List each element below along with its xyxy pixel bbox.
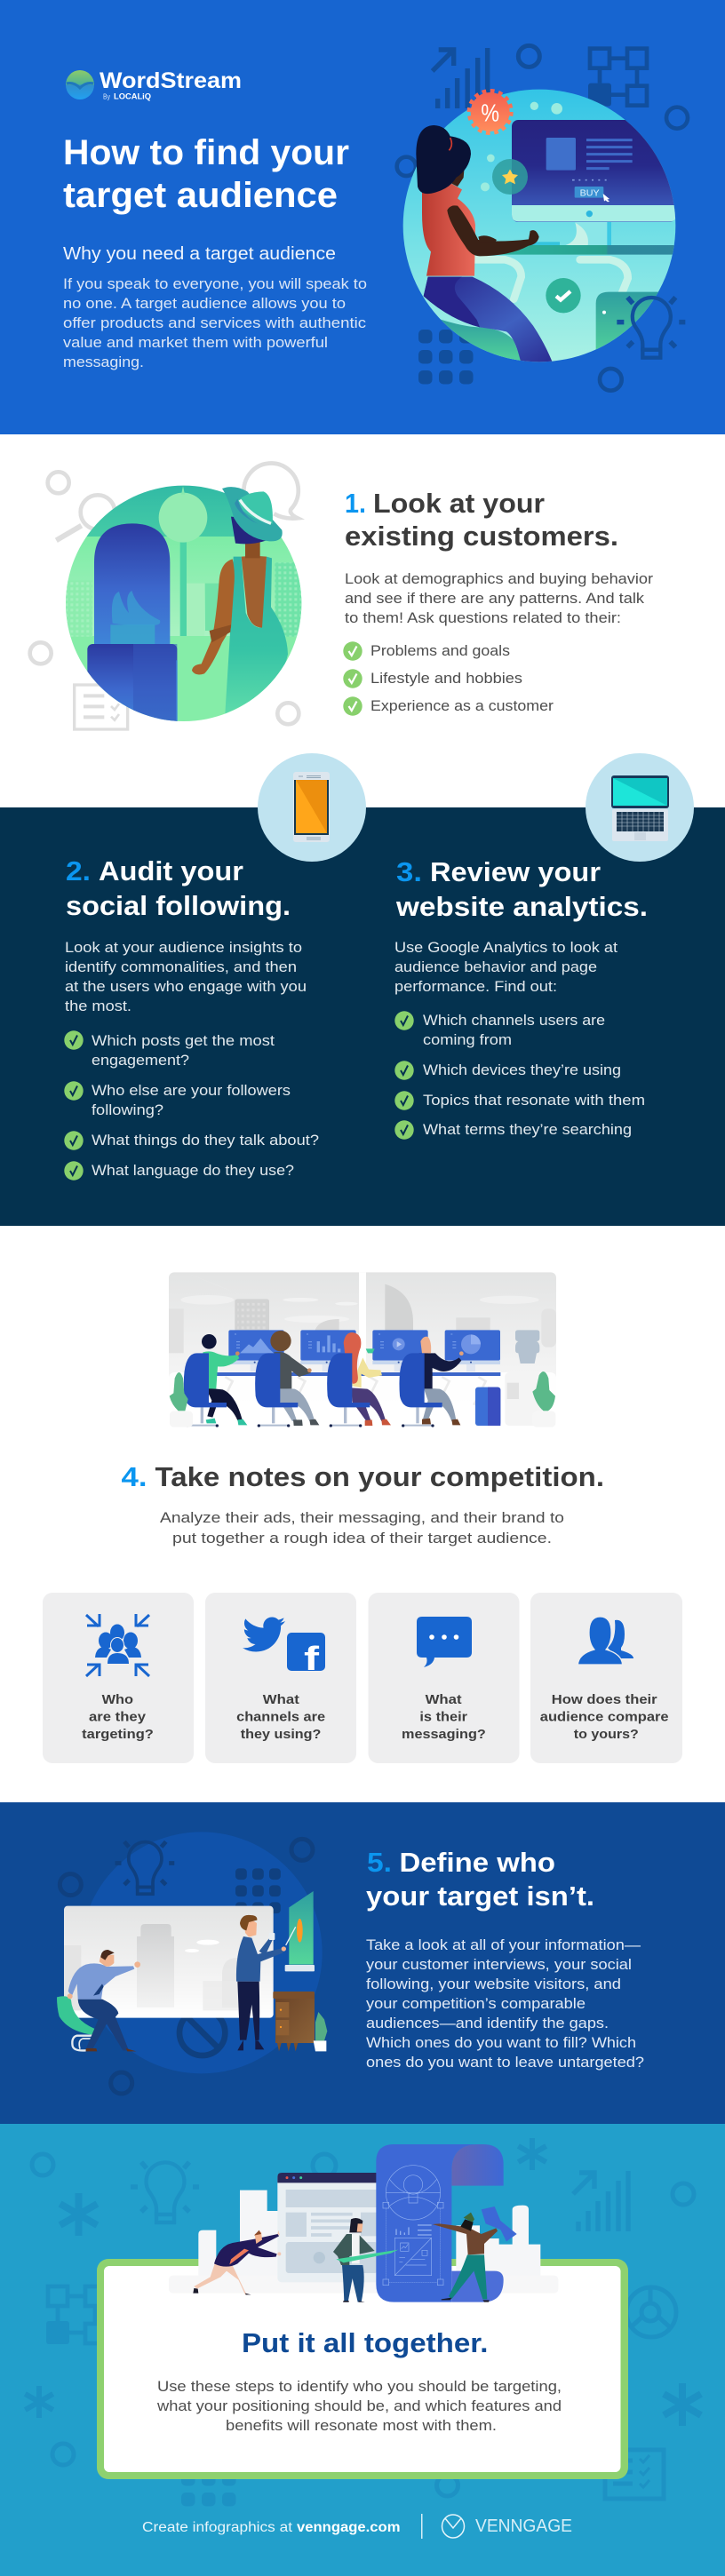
window with target [285, 1891, 315, 1971]
person 3 [327, 1332, 391, 1427]
logo: WordStream by LocaliQ: LOCALiQ [114, 92, 151, 101]
text block: hero intro: messaging. [63, 354, 144, 370]
text block: hero intro [63, 275, 367, 370]
checklist: step 3: coming from [423, 1031, 512, 1048]
text block: step 3: Use Google Analytics to look at [394, 939, 617, 956]
heading: step 2: Audit your [99, 855, 243, 886]
person 2 [255, 1331, 319, 1427]
heading: step 2 [66, 855, 291, 921]
card: audience comparison [530, 1593, 682, 1763]
icon: facebook [287, 1633, 325, 1678]
illustration: team building a blueprint [169, 2144, 558, 2302]
water cooler [505, 1330, 542, 1426]
figure: bearded man [433, 2206, 517, 2302]
title [63, 133, 349, 215]
person 1 [184, 1334, 247, 1427]
computer tower [475, 1387, 500, 1426]
checklist: step 1: Experience as a customer [370, 697, 554, 714]
logo: WordStream by LocaliQ: By [103, 92, 110, 101]
text block: step 4: put together a rough idea of their target audience. [172, 1530, 552, 1546]
footer: Create infographics at [142, 2520, 293, 2535]
text block: step 5: Take a look at all of your information— [366, 1936, 641, 1953]
heading: step 1: Look at your [373, 488, 545, 519]
backdrop circle [81, 1832, 323, 2073]
logo: WordStream by LocaliQ [66, 68, 242, 101]
icon: laptop [586, 753, 694, 862]
card label: What [263, 1692, 299, 1707]
text block: step 2: the most. [65, 998, 131, 1014]
icon: ring right [666, 107, 688, 129]
footer: venngage.com [297, 2520, 400, 2535]
text block: step 2: Look at your audience insights to [65, 939, 302, 956]
card label [236, 1692, 325, 1742]
text block: step 1 [345, 570, 653, 626]
panel: step 1 [28, 461, 653, 731]
icon: light bulb [617, 298, 685, 358]
icon: growth chart [433, 48, 488, 108]
icon: light bulb [116, 1841, 174, 1894]
card label: they using? [241, 1727, 321, 1742]
card label: audience compare [540, 1709, 669, 1725]
icons: rings [60, 1839, 313, 2094]
figure: man pushing [193, 2230, 281, 2294]
title: How to find your [63, 133, 349, 172]
icon: speech bubble [417, 1617, 472, 1667]
card: channels [205, 1593, 356, 1763]
heading: step 2: social following. [66, 890, 291, 921]
text block: hero intro: offer products and services with authentic [63, 314, 367, 331]
icon: ring bottom [600, 369, 622, 391]
card label: is their [419, 1709, 467, 1725]
card label: targeting? [82, 1727, 154, 1742]
icon: twitter bird [243, 1617, 285, 1652]
icon: percent badge [469, 91, 511, 133]
text block: closing [156, 2378, 562, 2434]
text block: step 5: following, your website visitors, and [366, 1976, 621, 1992]
icon: percent badge: % [481, 99, 499, 127]
footer [142, 2514, 572, 2539]
card label: What [426, 1692, 462, 1707]
text block: step 5: your competition’s comparable [366, 1995, 586, 2012]
icon: phone [258, 753, 366, 862]
heading: step 5: your target isn’t. [366, 1880, 594, 1912]
subheading: Why you need a target audience [63, 244, 336, 264]
blueprint scroll [376, 2144, 504, 2302]
text block: step 3 [394, 939, 617, 995]
panel: put it all together [0, 2124, 725, 2576]
panel: steps 2 and 3 [0, 753, 725, 1226]
heading: step 3: 3. [396, 856, 422, 887]
card label [540, 1692, 669, 1742]
panel: step 5 [0, 1802, 725, 2124]
text block: step 5 [366, 1936, 644, 2071]
heading: step 4: Take notes on your competition. [155, 1461, 604, 1492]
figure: woman with pencil [333, 2218, 398, 2302]
card label [402, 1692, 486, 1742]
figure: woman [416, 125, 539, 276]
icon: dot grid [418, 330, 473, 384]
checklist: step 2: Who else are your followers [92, 1082, 291, 1099]
text block: step 3: audience behavior and page [394, 958, 597, 975]
text block: step 4 [160, 1509, 564, 1546]
figure: woman in dress [225, 556, 288, 713]
text block: step 1: Look at demographics and buying behavior [345, 570, 653, 587]
text block: step 5: your customer interviews, your social [366, 1956, 632, 1973]
checklist: step 2: What language do they use? [92, 1162, 294, 1179]
title: target audience [63, 176, 338, 215]
text block: step 2 [65, 939, 307, 1014]
icon: WordStream mark [66, 70, 94, 99]
text block: hero intro: If you speak to everyone, you will speak to [63, 275, 367, 292]
illustration: woman window shopping [30, 464, 305, 729]
text block: step 2: identify commonalities, and then [65, 958, 297, 975]
text block: step 4: Analyze their ads, their messaging, and their brand to [160, 1509, 564, 1526]
scene circle [403, 90, 676, 364]
office window backdrop [169, 1272, 556, 1427]
icon: dot grid [235, 1868, 281, 1913]
checklist: step 1 [343, 641, 554, 716]
icon: no sign [179, 2010, 225, 2055]
icon: facebook: f [304, 1641, 319, 1678]
card label: Who [102, 1692, 133, 1707]
scene circle: BUY [580, 188, 600, 198]
figure: man pointing [236, 1915, 296, 2050]
checklist: step 2 [64, 1030, 319, 1181]
heading: step 5: Define who [400, 1847, 555, 1878]
text block: step 2: at the users who engage with you [65, 978, 307, 995]
checklist: step 2: following? [92, 1101, 163, 1118]
callout card [97, 2259, 628, 2479]
heading: step 5 [366, 1847, 594, 1912]
text block: step 5: ones do you want to leave untargeted? [366, 2054, 644, 2071]
icon: flow network [588, 49, 647, 107]
card label [82, 1692, 154, 1742]
heading: step 3: website analytics. [395, 891, 648, 922]
logo: Venngage [442, 2515, 572, 2538]
panel: hero [0, 0, 725, 434]
heading: step 3: Review your [430, 856, 601, 887]
checklist: step 1: Problems and goals [370, 642, 510, 659]
text block: step 1: to them! Ask questions related to their: [345, 609, 621, 626]
skyline [198, 2190, 540, 2277]
background icons [25, 2138, 701, 2507]
checklist: step 3: What terms they’re searching [423, 1121, 632, 1138]
text block: closing: Use these steps to identify who you should be targeting, [157, 2378, 562, 2395]
heading: step 3 [395, 856, 648, 922]
text block: step 3: performance. Find out: [394, 978, 557, 995]
whiteboard window [64, 1906, 274, 2018]
card label: messaging? [402, 1727, 486, 1742]
illustration: office team at monitors [169, 1272, 556, 1427]
checklist: step 3: Which channels users are [423, 1012, 605, 1029]
text block: hero intro: value and market them with powerful [63, 334, 328, 351]
grey icons [30, 464, 299, 729]
desk and monitors [216, 1330, 500, 1405]
card: messaging [368, 1593, 519, 1763]
card: targeting [43, 1593, 194, 1763]
text block: step 1: and see if there are any patterns. And talk [345, 590, 645, 607]
icon: ring left [397, 157, 416, 176]
browser window [277, 2173, 379, 2282]
plants [170, 1371, 555, 1427]
blueprint linework [383, 2166, 443, 2286]
heading: step 2: 2. [66, 855, 91, 886]
text block: step 5: Which ones do you want to fill? Which [366, 2034, 636, 2051]
plant [314, 2012, 327, 2051]
checklist: step 2: Which posts get the most [92, 1032, 275, 1049]
checklist: step 3: Which devices they’re using [423, 1061, 621, 1078]
logo: WordStream by LocaliQ: WordStream [100, 68, 242, 93]
icon: ring [518, 45, 539, 67]
checklist: step 3 [394, 1011, 645, 1140]
heading: step 1 [345, 488, 618, 552]
heading: step 5: 5. [367, 1847, 392, 1878]
illustration: woman at computer [397, 45, 688, 391]
icon: group with arrows [86, 1614, 149, 1676]
heading: step 1: 1. [345, 488, 366, 519]
card label: channels are [236, 1709, 325, 1725]
logo: Venngage: VENNGAGE [475, 2516, 572, 2536]
text block: closing: what your positioning should be, and which features and [156, 2397, 562, 2414]
checklist: step 1: Lifestyle and hobbies [370, 670, 522, 687]
text block: step 5: audiences—and identify the gaps. [366, 2015, 609, 2031]
checklist: step 3: Topics that resonate with them [423, 1092, 645, 1109]
cabinet [273, 1992, 315, 2051]
person 4 [399, 1337, 464, 1427]
card label: How does their [552, 1692, 657, 1707]
card label: to yours? [574, 1727, 639, 1742]
checklist: step 2: What things do they talk about? [92, 1132, 319, 1149]
figure: man seated [57, 1950, 140, 2051]
scene circle [62, 482, 305, 728]
panel: step 4 [0, 1226, 725, 1802]
heading: step 4: 4. [121, 1461, 147, 1492]
heading: step 1: existing customers. [345, 521, 618, 552]
checklist: step 2: engagement? [92, 1052, 189, 1069]
illustration: presentation scene [57, 1832, 327, 2094]
icon: two people [578, 1617, 633, 1665]
text block: hero intro: no one. A target audience allows you to [63, 295, 346, 312]
text block: closing: benefits will resonate most with them. [226, 2417, 497, 2434]
card label: are they [89, 1709, 147, 1725]
heading: put it all together: Put it all together. [242, 2327, 489, 2358]
